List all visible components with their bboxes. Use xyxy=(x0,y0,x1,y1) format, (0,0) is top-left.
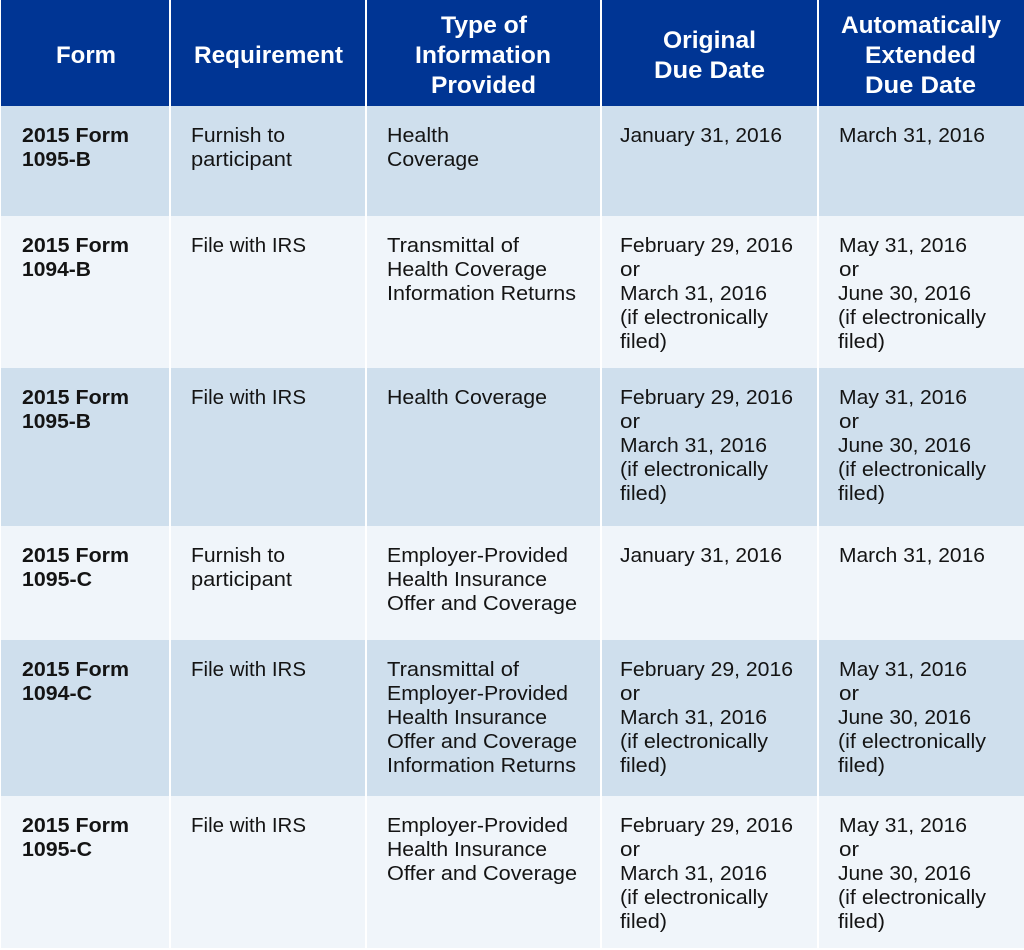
row 3: 1095-B file xyxy=(1,368,1024,526)
row 6: 1095-C file: Health Insurance xyxy=(387,839,547,861)
row 5: 1094-C file: or xyxy=(620,683,640,705)
row 1: 1095-B furnish: January 31, 2016 xyxy=(620,125,782,147)
row 6: 1095-C file: February 29, 2016 xyxy=(620,815,793,837)
row 5: 1094-C file: March 31, 2016 xyxy=(620,707,767,729)
row 4: 1095-C furnish: March 31, 2016 xyxy=(839,545,985,567)
row 5: 1094-C file: (if electronically xyxy=(620,731,768,753)
header: Form: Form xyxy=(56,42,116,69)
row 5: 1094-C file: Information Returns xyxy=(387,755,576,777)
row 2: 1094-B file: Health Coverage xyxy=(387,259,547,281)
row 6: 1095-C file: (if electronically xyxy=(838,887,986,909)
header: Type of Information Provided: Type of xyxy=(441,12,528,39)
row 3: 1095-B file: May 31, 2016 xyxy=(839,387,967,409)
row 2: 1094-B file: 1094-B xyxy=(22,259,91,281)
row 1: 1095-B furnish: Furnish to xyxy=(191,125,285,147)
row 2: 1094-B file: File with IRS xyxy=(191,235,306,257)
row 2: 1094-B file: (if electronically xyxy=(838,307,986,329)
row 1: 1095-B furnish: Health xyxy=(387,125,449,147)
row 4: 1095-C furnish: January 31, 2016 xyxy=(620,545,782,567)
row 5: 1094-C file: filed) xyxy=(620,755,667,777)
row 6: 1095-C file: March 31, 2016 xyxy=(620,863,767,885)
header: Automatically Extended Due Date: Extended xyxy=(865,42,976,69)
row 3: 1095-B file: filed) xyxy=(620,483,667,505)
row 5: 1094-C file: or xyxy=(839,683,859,705)
row 6: 1095-C file: May 31, 2016 xyxy=(839,815,967,837)
row 5: 1094-C file: Transmittal of xyxy=(387,659,519,681)
row 1: 1095-B furnish xyxy=(1,106,1024,216)
row 4: 1095-C furnish: 2015 Form xyxy=(22,545,129,567)
row 3: 1095-B file: 2015 Form xyxy=(22,387,129,409)
row 3: 1095-B file: Health Coverage xyxy=(387,387,547,409)
row 4: 1095-C furnish xyxy=(1,526,1024,640)
row 5: 1094-C file: 2015 Form xyxy=(22,659,129,681)
row 3: 1095-B file: 1095-B xyxy=(22,411,91,433)
header: Automatically Extended Due Date xyxy=(841,12,1002,99)
row 3: 1095-B file: File with IRS xyxy=(191,387,306,409)
row 2: 1094-B file xyxy=(1,216,1024,368)
row 1: 1095-B furnish: March 31, 2016 xyxy=(839,125,985,147)
row 6: 1095-C file: or xyxy=(620,839,640,861)
row 5: 1094-C file: June 30, 2016 xyxy=(838,707,971,729)
row 1: 1095-B furnish: 2015 Form xyxy=(22,125,129,147)
row 3: 1095-B file: filed) xyxy=(838,483,885,505)
row 6: 1095-C file: filed) xyxy=(838,911,885,933)
row 4: 1095-C furnish: Furnish to xyxy=(191,545,285,567)
row 5: 1094-C file: 1094-C xyxy=(22,683,92,705)
row 3: 1095-B file: March 31, 2016 xyxy=(620,435,767,457)
row 2: 1094-B file: or xyxy=(620,259,640,281)
row 6: 1095-C file: or xyxy=(839,839,859,861)
row 2: 1094-B file: Transmittal of xyxy=(387,235,519,257)
row 3: 1095-B file: February 29, 2016 xyxy=(620,387,793,409)
row 6: 1095-C file: File with IRS xyxy=(191,815,306,837)
row 6: 1095-C file: (if electronically xyxy=(620,887,768,909)
header: Original Due Date xyxy=(654,27,765,84)
row 5: 1094-C file: (if electronically xyxy=(838,731,986,753)
row 2: 1094-B file: (if electronically xyxy=(620,307,768,329)
row 5: 1094-C file xyxy=(1,640,1024,796)
row 3: 1095-B file: (if electronically xyxy=(620,459,768,481)
row 1: 1095-B furnish: Coverage xyxy=(387,149,479,171)
row 2: 1094-B file: filed) xyxy=(620,331,667,353)
header: Type of Information Provided: Information xyxy=(415,42,551,69)
row 5: 1094-C file: May 31, 2016 xyxy=(839,659,967,681)
row 5: 1094-C file: Employer-Provided xyxy=(387,683,568,705)
header: Type of Information Provided xyxy=(415,12,551,99)
row 2: 1094-B file: 2015 Form xyxy=(22,235,129,257)
row 4: 1095-C furnish: Health Insurance xyxy=(387,569,547,591)
row 1: 1095-B furnish: 1095-B xyxy=(22,149,91,171)
row 2: 1094-B file: Information Returns xyxy=(387,283,576,305)
row 4: 1095-C furnish: participant xyxy=(191,569,292,591)
header row xyxy=(1,0,1024,106)
header: Type of Information Provided: Provided xyxy=(431,72,536,99)
header: Automatically Extended Due Date: Due Date xyxy=(865,72,976,99)
row 5: 1094-C file: Health Insurance xyxy=(387,707,547,729)
row 5: 1094-C file: Offer and Coverage xyxy=(387,731,577,753)
row 3: 1095-B file: June 30, 2016 xyxy=(838,435,971,457)
row 4: 1095-C furnish: Offer and Coverage xyxy=(387,593,577,615)
row 4: 1095-C furnish: 1095-C xyxy=(22,569,92,591)
row 2: 1094-B file: March 31, 2016 xyxy=(620,283,767,305)
row 6: 1095-C file: Employer-Provided xyxy=(387,815,568,837)
row 1: 1095-B furnish: participant xyxy=(191,149,292,171)
row 5: 1094-C file: File with IRS xyxy=(191,659,306,681)
header: Automatically Extended Due Date: Automatically xyxy=(841,12,1002,39)
header: Original Due Date: Original xyxy=(663,27,756,54)
row 6: 1095-C file: Offer and Coverage xyxy=(387,863,577,885)
row 2: 1094-B file: May 31, 2016 xyxy=(839,235,967,257)
row 6: 1095-C file: 2015 Form xyxy=(22,815,129,837)
row 6: 1095-C file xyxy=(1,796,1024,948)
row 6: 1095-C file: June 30, 2016 xyxy=(838,863,971,885)
row 5: 1094-C file: filed) xyxy=(838,755,885,777)
header: Requirement: Requirement xyxy=(194,42,343,69)
row 3: 1095-B file: (if electronically xyxy=(838,459,986,481)
row 2: 1094-B file: filed) xyxy=(838,331,885,353)
row 4: 1095-C furnish: Employer-Provided xyxy=(387,545,568,567)
row 3: 1095-B file: or xyxy=(839,411,859,433)
row 2: 1094-B file: February 29, 2016 xyxy=(620,235,793,257)
row 2: 1094-B file: or xyxy=(839,259,859,281)
row 2: 1094-B file: June 30, 2016 xyxy=(838,283,971,305)
row 6: 1095-C file: 1095-C xyxy=(22,839,92,861)
row 3: 1095-B file: or xyxy=(620,411,640,433)
row 5: 1094-C file: February 29, 2016 xyxy=(620,659,793,681)
row 6: 1095-C file: filed) xyxy=(620,911,667,933)
header: Original Due Date: Due Date xyxy=(654,57,765,84)
